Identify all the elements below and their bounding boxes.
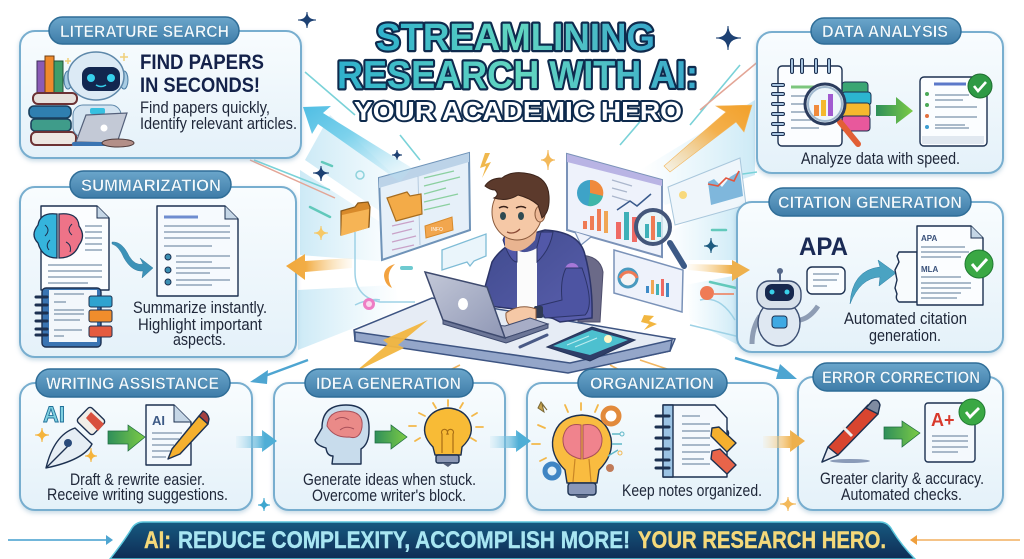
headline: FIND PAPERS xyxy=(140,51,264,74)
hair xyxy=(485,173,549,218)
tablet xyxy=(547,327,635,361)
desk xyxy=(354,298,675,373)
icon: checked document xyxy=(920,74,992,146)
text block: Receive writing suggestions. xyxy=(47,486,228,504)
icon: light bulb xyxy=(409,400,483,467)
icon: robot with speech bubble xyxy=(752,267,845,346)
arrow: green xyxy=(876,97,913,124)
headline xyxy=(140,51,264,97)
text block: Summarize instantly. xyxy=(133,299,267,317)
text block xyxy=(133,299,267,349)
text block xyxy=(820,470,984,504)
window: small charts xyxy=(614,250,683,312)
text block: Automated checks. xyxy=(841,486,962,504)
heading pill xyxy=(811,18,961,44)
banner: REDUCE COMPLEXITY, ACCOMPLISH MORE! xyxy=(178,527,630,554)
arrow: organization to error correction xyxy=(763,430,805,452)
heading pill xyxy=(70,171,231,198)
arrow: idea to organization xyxy=(490,430,531,452)
icon: books and robot xyxy=(29,52,134,147)
icon: fountain pen xyxy=(35,406,106,468)
text block: Draft & rewrite easier. xyxy=(70,471,205,489)
shirt xyxy=(517,248,537,308)
banner xyxy=(110,522,915,559)
text block: Generate ideas when stuck. xyxy=(303,471,476,489)
icon: floating folder xyxy=(341,202,370,236)
eyes and smile xyxy=(499,206,526,233)
arrow: to writing assistance xyxy=(250,360,308,384)
text block xyxy=(140,99,297,133)
text block: Analyze data with speed. xyxy=(801,150,960,168)
arrow: curved xyxy=(850,260,896,304)
panel: citation generation xyxy=(737,188,1003,352)
heading pill xyxy=(305,369,473,397)
arrow: to citation generation xyxy=(688,260,750,281)
banner: YOUR RESEARCH HERO. xyxy=(638,527,886,554)
icon: notebook with tags xyxy=(656,405,736,477)
panel: organization xyxy=(527,369,778,510)
arrow: to data analysis xyxy=(664,105,752,172)
panel: data analysis xyxy=(757,18,1003,173)
hood collar xyxy=(503,232,553,262)
icon: head with brain xyxy=(315,405,369,464)
ear xyxy=(535,206,545,222)
panel: summarization xyxy=(20,171,296,357)
heading pill: IDEA GENERATION xyxy=(316,375,461,393)
arrow: green xyxy=(108,425,145,451)
icon: graded paper xyxy=(925,399,985,462)
lightning bolt small xyxy=(641,315,657,330)
icon: AI document and pencil: AI xyxy=(152,413,165,428)
text block: Keep notes organized. xyxy=(622,482,762,500)
window: left file browser: INFO xyxy=(431,227,443,233)
arrow: curved xyxy=(112,242,153,278)
text block: Greater clarity & accuracy. xyxy=(820,470,984,488)
heading pill: DATA ANALYSIS xyxy=(822,23,948,41)
window: far right mini chart xyxy=(668,158,746,225)
heading pill xyxy=(49,17,239,44)
hoodie body xyxy=(480,230,592,322)
text block: Highlight important xyxy=(138,316,262,334)
heading pill: ORGANIZATION xyxy=(590,375,714,393)
window: left file browser xyxy=(379,153,470,260)
heading pill xyxy=(36,369,230,397)
laptop xyxy=(425,272,548,343)
icon: magnifier xyxy=(636,210,684,266)
title: YOUR ACADEMIC HERO xyxy=(354,96,682,126)
central illustration: researcher at desk xyxy=(341,153,746,373)
text block xyxy=(844,310,967,345)
icon: document with brain xyxy=(34,206,109,290)
title: STREAMLINING xyxy=(376,17,655,59)
heading pill xyxy=(813,363,990,391)
title xyxy=(337,17,698,126)
person xyxy=(480,173,592,328)
icon: citation document: MLA xyxy=(921,265,939,274)
panel: idea generation xyxy=(274,369,505,510)
heading pill: WRITING ASSISTANCE xyxy=(46,375,219,393)
icon: AI document and pencil xyxy=(146,405,209,465)
heading pill xyxy=(769,188,971,216)
window: right charts xyxy=(567,154,662,257)
arrow: to literature search xyxy=(303,106,412,182)
arrow: writing to idea xyxy=(236,430,277,452)
lightning bolt xyxy=(355,320,428,372)
banner: AI: xyxy=(144,527,171,554)
purple patch xyxy=(565,263,579,277)
icon: red pen xyxy=(822,400,880,463)
heading pill: CITATION GENERATION xyxy=(778,194,962,212)
stylus xyxy=(520,335,547,347)
icon: notebook with tabs xyxy=(36,288,112,347)
panel: error correction xyxy=(798,363,1003,510)
heading pill: ERROR CORRECTION xyxy=(822,369,980,387)
heading pill xyxy=(578,369,727,397)
sparkles xyxy=(258,12,796,511)
icon: brain bulb xyxy=(532,402,624,498)
text block: Identify relevant articles. xyxy=(140,115,297,133)
text block xyxy=(303,471,476,505)
arrow: right banner pointer xyxy=(910,535,1020,545)
arrow: green xyxy=(884,421,920,447)
icon: citation document: APA xyxy=(921,234,938,243)
curved swirl xyxy=(356,171,411,310)
chat bubble left xyxy=(442,234,486,270)
icon: notebook and magnifier xyxy=(773,60,871,146)
icon: citation document xyxy=(895,226,993,305)
chair xyxy=(578,255,603,322)
text block: Find papers quickly, xyxy=(140,99,270,117)
neck and face xyxy=(505,225,538,251)
icon: graded paper: A+ xyxy=(931,410,955,430)
headline: IN SECONDS! xyxy=(140,74,260,97)
icon: summary document xyxy=(157,206,238,296)
dot node xyxy=(700,286,734,300)
arrow: left banner pointer xyxy=(8,535,113,545)
text block: Automated citation xyxy=(844,310,967,328)
panel: writing assistance xyxy=(20,369,252,510)
arrow: to error correction xyxy=(735,358,797,379)
background rays xyxy=(250,60,760,375)
arrow: green xyxy=(375,425,407,449)
text block: Overcome writer's block. xyxy=(312,487,466,505)
text block: aspects. xyxy=(173,331,226,349)
arm and hand xyxy=(538,268,589,318)
panel: literature search xyxy=(20,17,301,158)
heading pill: LITERATURE SEARCH xyxy=(60,23,229,41)
text block xyxy=(47,471,228,504)
text block: generation. xyxy=(869,327,941,345)
title: RESEARCH WITH AI: xyxy=(337,54,698,97)
heading pill: SUMMARIZATION xyxy=(81,177,221,195)
label APA: APA xyxy=(799,233,848,261)
arrow: to summarization xyxy=(286,254,352,280)
label: AI: AI xyxy=(43,402,65,427)
